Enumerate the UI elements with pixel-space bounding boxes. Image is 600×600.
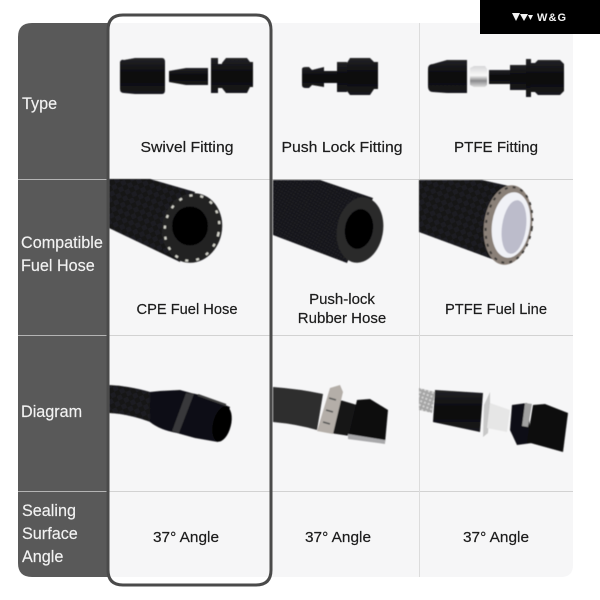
cell text: 37 degree angle, push lock: 37° Angle xyxy=(305,529,371,546)
image: push lock diagram xyxy=(273,385,388,444)
image: swivel fitting diagram xyxy=(109,385,235,444)
cell text: Swivel Fitting: Swivel Fitting xyxy=(140,139,234,156)
icon: PTFE fuel line xyxy=(419,180,537,268)
row label: Diagram: Diagram xyxy=(21,403,82,421)
row label: Compatible Fuel Hose: Fuel Hose xyxy=(21,257,95,275)
cell text: Push Lock Fitting: Push Lock Fitting xyxy=(282,139,402,156)
cell text: Push-lock Rubber Hose: Rubber Hose xyxy=(298,310,386,327)
cell text: Push-lock Rubber Hose: Push-lock xyxy=(309,291,375,308)
cell text: PTFE Fitting: PTFE Fitting xyxy=(454,139,538,156)
highlight frame around swivel column xyxy=(108,15,271,585)
table panel background xyxy=(108,23,573,577)
icon: PTFE fitting xyxy=(428,59,564,97)
icon: push lock fitting xyxy=(302,58,378,95)
logo text: W&G xyxy=(537,12,567,24)
row label: Type: Type xyxy=(22,95,57,113)
icon: logo triangles xyxy=(512,13,533,21)
row label: Sealing Surface Angle: Surface xyxy=(22,525,78,543)
left header column xyxy=(18,23,108,577)
cell text: PTFE Fuel Line: PTFE Fuel Line xyxy=(445,301,547,318)
cell text: 37 degree angle, PTFE: 37° Angle xyxy=(463,529,529,546)
icon: rubber hose xyxy=(273,180,388,266)
icon: CPE fuel hose xyxy=(109,179,229,268)
cell text: CPE Fuel Hose: CPE Fuel Hose xyxy=(136,301,238,318)
row label: Sealing Surface Angle: Sealing xyxy=(22,502,76,520)
logo badge xyxy=(480,0,600,34)
icon: swivel fitting xyxy=(120,58,253,94)
row label: Sealing Surface Angle: Angle xyxy=(22,548,63,566)
image: PTFE fitting diagram xyxy=(419,388,568,452)
row label: Compatible Fuel Hose: Compatible xyxy=(21,234,103,252)
cell text: 37 degree angle, swivel: 37° Angle xyxy=(153,529,219,546)
